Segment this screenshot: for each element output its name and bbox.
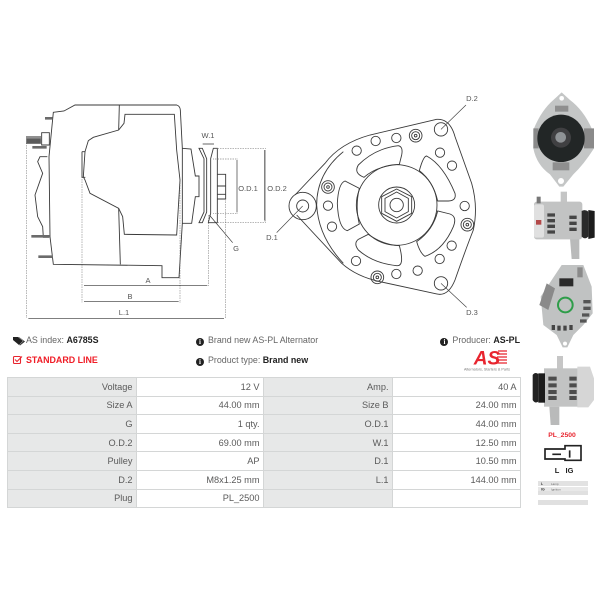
dimension labels side view: G [233, 244, 239, 253]
specification table: 12 V [241, 382, 260, 392]
dimension labels side view: W.1 [202, 131, 214, 140]
specification table: 24.00 mm [476, 400, 516, 410]
plug pin table: IG [541, 488, 545, 492]
specification table: M8x1.25 mm [206, 475, 260, 485]
plug pin labels: L [555, 466, 560, 475]
specification table: O.D.2 [108, 438, 132, 448]
dimension labels side view: O.D.1 [238, 184, 258, 193]
plug pin table: Ignition [551, 488, 561, 492]
specification table: Amp. [367, 382, 388, 392]
specification table: 1 qty. [238, 419, 260, 429]
leader lines [265, 105, 467, 307]
plug pin table [538, 481, 588, 505]
hex nut [379, 187, 415, 223]
specification table: 40 A [498, 382, 516, 392]
specification table: 12.50 mm [476, 438, 516, 448]
dimension labels side view: O.D.2 [267, 184, 287, 193]
specification table: Size A [106, 400, 132, 410]
dimension labels side view [119, 131, 287, 317]
dimension labels front view: D.1 [266, 233, 278, 242]
standard line: STANDARD LINE [26, 355, 98, 365]
product photo: rear [539, 265, 593, 347]
dimension labels front view: D.3 [466, 308, 478, 317]
specification table: D.2 [118, 475, 132, 485]
product photo: side right [534, 192, 595, 259]
bolts front [409, 129, 422, 142]
alternator housing outline [49, 105, 182, 278]
dimension labels side view: L.1 [119, 308, 129, 317]
dimension labels side view: B [127, 292, 133, 301]
plug pin labels [555, 466, 574, 475]
product photo: front [533, 92, 594, 187]
plug code: PL_2500 [548, 432, 576, 439]
AS index: AS index: A6785S [26, 335, 99, 345]
specification table: 144.00 mm [471, 475, 516, 485]
plug diagram [545, 446, 581, 460]
specification table [7, 377, 521, 508]
specification table: 69.00 mm [219, 438, 260, 448]
specification table: L.1 [376, 475, 388, 485]
product photo: side left [533, 356, 594, 425]
specification table: G [125, 419, 132, 429]
icon: checked box [14, 356, 22, 364]
plug pin table: L [541, 482, 544, 486]
specification table: D.1 [374, 456, 388, 466]
front view technical drawing [265, 105, 475, 307]
specification table: Size B [362, 400, 388, 410]
holes [352, 146, 361, 155]
AS logo: Alternators, Starters & Parts [464, 368, 510, 372]
dimension labels front view [266, 94, 478, 317]
plug pin table: Lamp [551, 482, 559, 486]
specification table: Voltage [102, 382, 132, 392]
specification table: O.D.1 [364, 419, 388, 429]
AS logo [464, 348, 510, 372]
AS logo: AS [473, 348, 501, 370]
specification table: 10.50 mm [476, 456, 516, 466]
brand note: i [199, 338, 201, 346]
specification table: AP [247, 456, 260, 466]
bolts [27, 118, 53, 257]
dimension labels side view: A [145, 276, 151, 285]
flange outline [295, 119, 475, 294]
dimension labels front view: D.2 [466, 94, 478, 103]
producer: i [443, 338, 445, 346]
specification table: 44.00 mm [476, 419, 516, 429]
plug pin labels: IG [566, 466, 574, 475]
product type: Product type: Brand new [208, 355, 308, 365]
brand note: Brand new AS-PL Alternator [208, 335, 318, 345]
specification table: PL_2500 [223, 493, 260, 503]
specification table: 44.00 mm [219, 400, 260, 410]
product type: i [199, 358, 201, 366]
cooling windows [357, 146, 402, 177]
specification table: Pulley [107, 456, 132, 466]
specification table: Plug [114, 493, 132, 503]
dimension lines [27, 143, 267, 318]
specification table: W.1 [373, 438, 388, 448]
producer: Producer: AS-PL [452, 335, 520, 345]
icon: tags [13, 337, 25, 346]
